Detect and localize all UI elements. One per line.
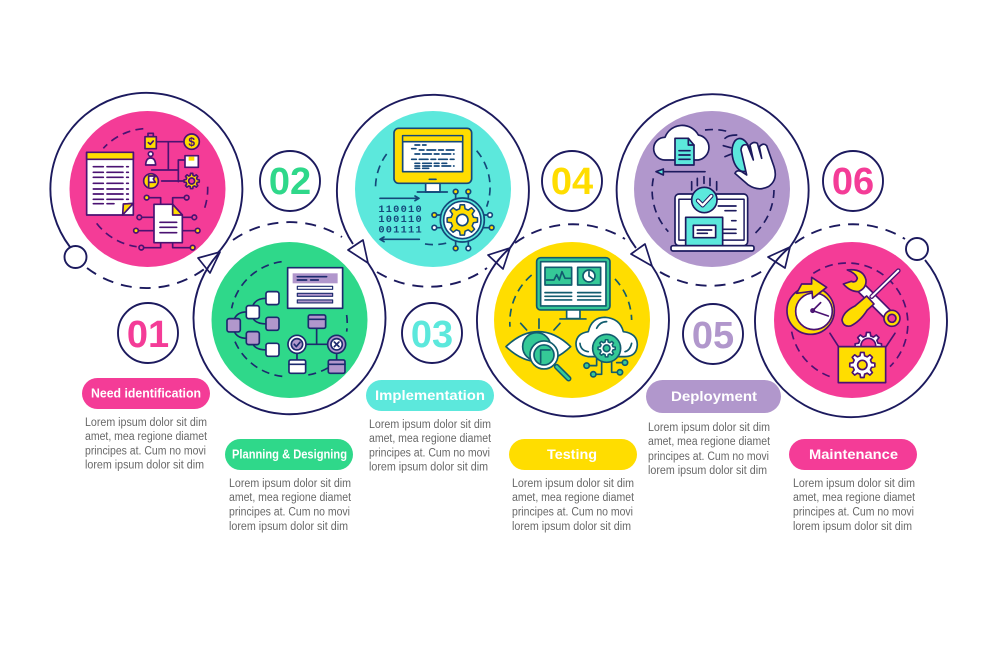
label pill: deployment: Deployment [671,388,757,404]
text block: step 06 [793,478,916,533]
disc: step 01 [70,111,226,267]
ring: step 05 [617,94,809,286]
panel: step 01 need identification [50,93,242,471]
text block: step 03: Lorem ipsum dolor sit dim [369,419,491,431]
disc: step 02 [212,242,368,398]
ring: step 04 [477,224,669,416]
disc: step 05 [634,111,790,267]
label pill: planning and designing [225,439,353,470]
panel: step 05 deployment [617,94,809,477]
label pill: maintenance: Maintenance [809,446,898,462]
ring: step 03 [337,95,529,287]
number badge: 06: 06 [832,161,874,203]
text block: step 05 [648,422,771,477]
label pill: implementation: Implementation [375,387,485,403]
number badge: 02 [260,151,320,211]
label pill: deployment [646,380,781,413]
icon: flow chart and planning window [227,262,347,377]
text block: step 01: amet, mea regione diamet [85,431,208,443]
panel: step 06 maintenance [755,151,947,533]
icon: cloud upload, mouse and laptop [652,125,775,251]
icon: monitor, binary code and gear: 100110 [378,214,422,226]
ring: step 06 [755,224,947,417]
text block: step 02: Lorem ipsum dolor sit dim [229,478,351,490]
label pill: testing [509,439,637,470]
text block: step 05: principes at. Cum no movi [648,451,769,463]
number badge: 05: 05 [692,315,734,357]
icon: documents and requirements: $ [188,135,195,149]
text block: step 06: amet, mea regione diamet [793,492,916,504]
text block: step 04: amet, mea regione diamet [512,492,635,504]
text block: step 02: lorem ipsum dolor sit dim [229,521,348,533]
ring: step 02 [193,222,385,414]
text block: step 03: principes at. Cum no movi [369,448,490,460]
icon: monitor, binary code and gear: 001111 [378,225,422,237]
number badge: 06 [823,151,883,211]
text block: step 06: lorem ipsum dolor sit dim [793,521,912,533]
icon: clock, tools and gear box [786,263,908,383]
label pill: need identification: Need identification [91,386,201,400]
text block: step 04: lorem ipsum dolor sit dim [512,521,631,533]
icon: monitor, binary code and gear [376,128,494,251]
disc: step 06 [774,242,930,398]
text block: step 03 [369,419,492,474]
panel: step 03 implementation [337,95,529,474]
number badge: 03: 03 [411,314,453,356]
text block: step 01 [85,417,208,472]
icon: monitor, eye and cloud [506,258,637,379]
number badge: 02: 02 [269,161,311,203]
label pill: maintenance [789,439,917,470]
text block: step 06: Lorem ipsum dolor sit dim [793,478,915,490]
icon: monitor, binary code and gear: 110010 [378,204,422,216]
ring: step 01 [50,93,242,288]
label pill: testing: Testing [547,446,597,462]
text block: step 01: principes at. Cum no movi [85,446,206,458]
number badge: 01: 01 [127,314,169,356]
disc: step 04 [494,242,650,398]
label pill: planning and designing: Planning & Designing [232,446,347,462]
icon: documents and requirements [87,129,208,250]
text block: step 03: amet, mea regione diamet [369,433,492,445]
text block: step 05: amet, mea regione diamet [648,436,771,448]
text block: step 06: principes at. Cum no movi [793,506,914,518]
text block: step 02: principes at. Cum no movi [229,506,350,518]
panel: step 02 planning and designing [193,151,385,533]
text block: step 01: Lorem ipsum dolor sit dim [85,417,207,429]
number badge: 01 [118,303,178,363]
text block: step 04: Lorem ipsum dolor sit dim [512,478,634,490]
text block: step 04: principes at. Cum no movi [512,506,633,518]
text block: step 05: lorem ipsum dolor sit dim [648,465,767,477]
text block: step 02 [229,478,352,533]
label pill: need identification [82,378,210,409]
disc: step 03 [355,111,511,267]
text block: step 02: amet, mea regione diamet [229,492,352,504]
panel: step 04 testing [477,151,669,533]
number badge: 04 [542,151,602,211]
number badge: 04: 04 [551,161,593,203]
number badge: 03 [402,303,462,363]
text block: step 03: lorem ipsum dolor sit dim [369,462,488,474]
number badge: 05 [683,304,743,364]
text block: step 05: Lorem ipsum dolor sit dim [648,422,770,434]
text block: step 04 [512,478,635,533]
text block: step 01: lorem ipsum dolor sit dim [85,460,204,472]
label pill: implementation [366,380,494,411]
